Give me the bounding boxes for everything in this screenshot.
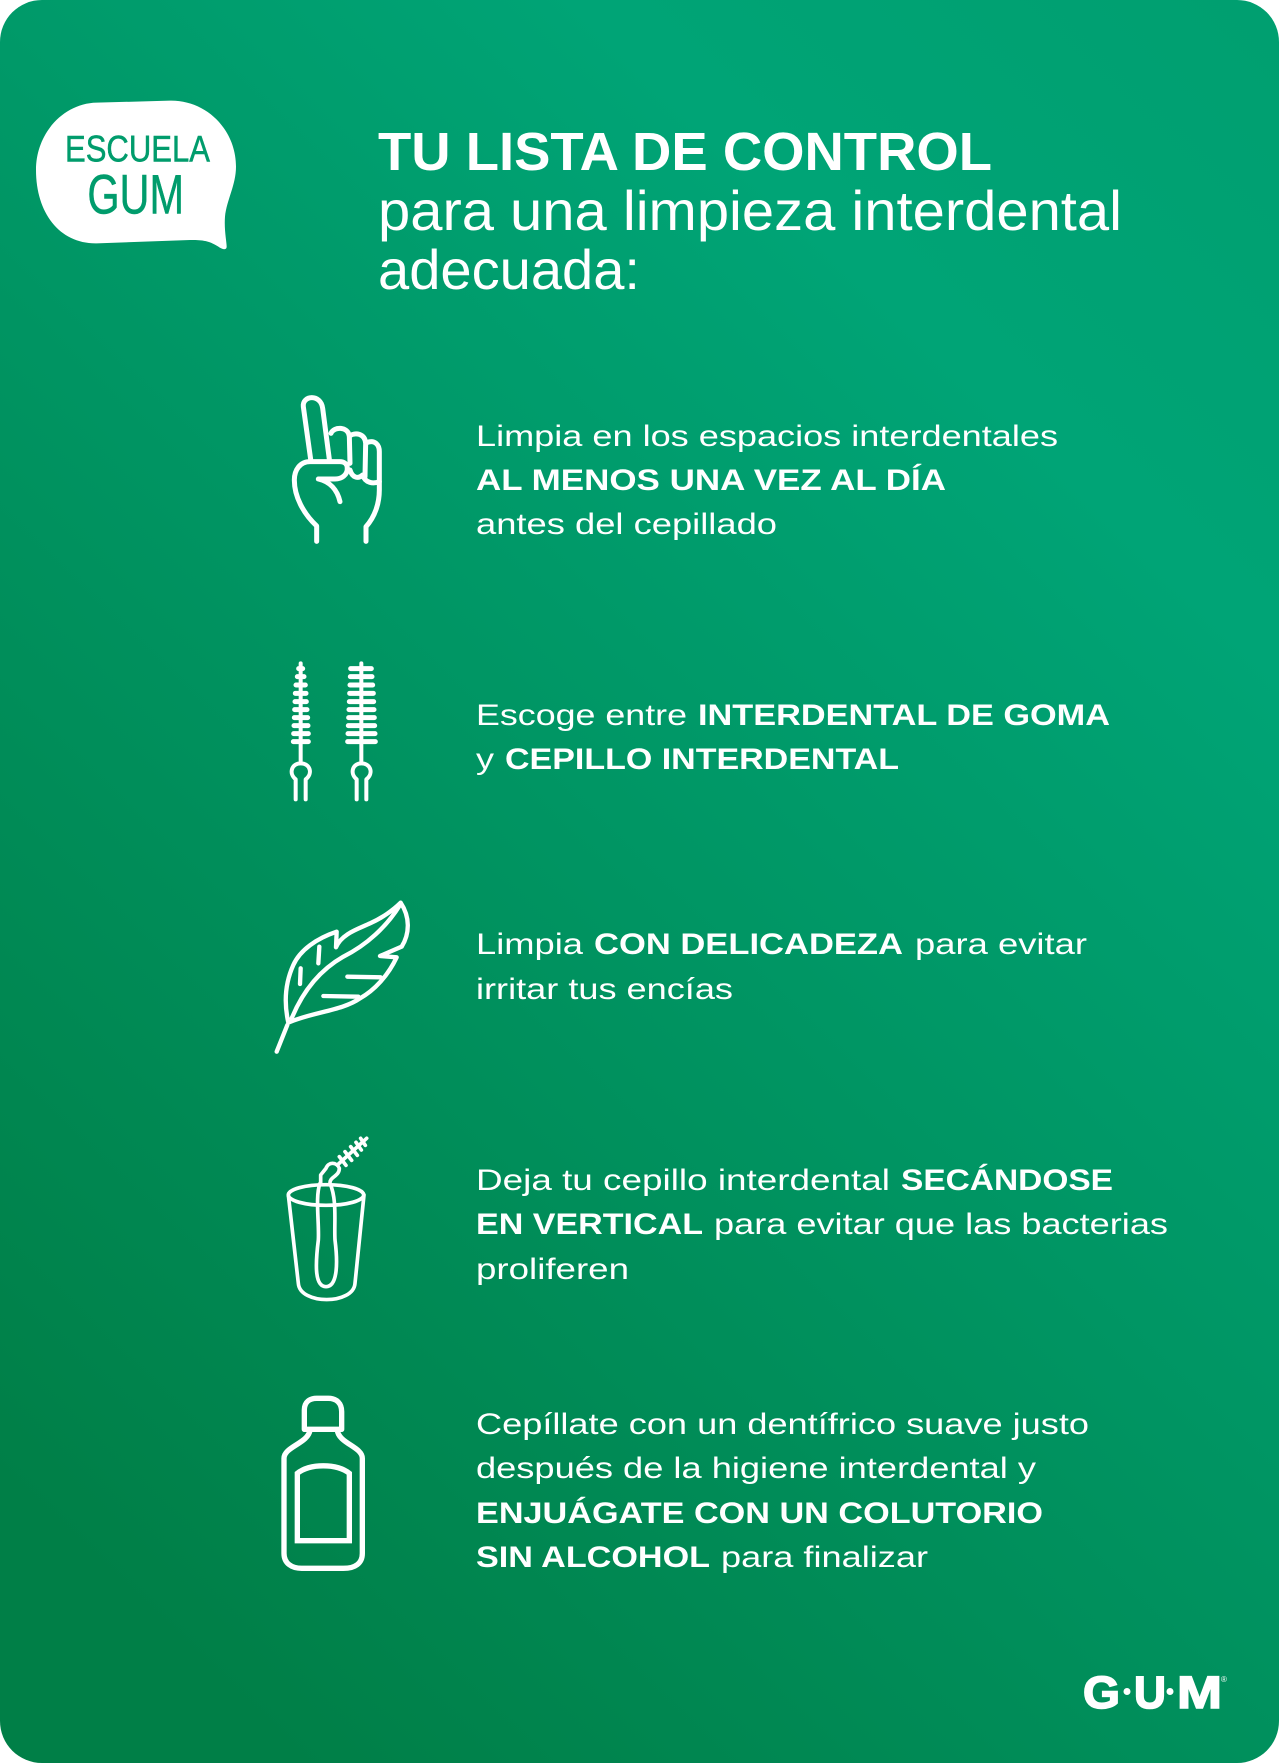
line bold: AL MENOS UNA VEZ AL DÍA xyxy=(476,463,946,497)
line run: Limpia xyxy=(476,928,583,961)
icon: interdental brushes xyxy=(292,663,375,799)
icon: mouthwash bottle xyxy=(284,1398,362,1568)
line run: para evitar xyxy=(915,928,1087,961)
logo letter M: M xyxy=(1177,1667,1222,1718)
logo letter G: G xyxy=(1083,1667,1120,1718)
bubble shape xyxy=(36,101,236,249)
icon: brush drying in glass xyxy=(288,1138,367,1300)
text block 3 xyxy=(476,928,1087,1006)
text block 4 xyxy=(476,1163,1168,1286)
bubble text: GUM: GUM xyxy=(87,163,184,225)
bubble text: ESCUELA: ESCUELA xyxy=(65,128,210,170)
text block 1 xyxy=(476,420,1058,541)
line run bold: SECÁNDOSE xyxy=(901,1163,1113,1197)
icon: feather leaf xyxy=(277,903,408,1052)
line: Cepíllate con un dentífrico suave justo xyxy=(476,1408,1089,1441)
line run bold: SIN ALCOHOL xyxy=(476,1541,710,1574)
title line 2: para una limpieza interdental xyxy=(378,179,1122,242)
logo registered mark: ® xyxy=(1221,1675,1227,1684)
title line 1: TU LISTA DE CONTROL xyxy=(378,122,992,182)
text block 5 xyxy=(476,1408,1089,1574)
line bold: ENJUÁGATE CON UN COLUTORIO xyxy=(476,1496,1043,1530)
logo letter U: U xyxy=(1134,1667,1166,1718)
GUM brand logo xyxy=(1083,1667,1227,1718)
line: proliferen xyxy=(476,1253,629,1286)
line run: para finalizar xyxy=(721,1541,928,1574)
speech bubble logo: Escuela GUM xyxy=(36,101,236,249)
line run: para evitar que las bacterias xyxy=(714,1208,1168,1241)
line run: Deja tu cepillo interdental xyxy=(476,1164,890,1197)
line run bold: CON DELICADEZA xyxy=(594,928,903,961)
line run: y xyxy=(476,743,494,776)
logo dot xyxy=(1124,1688,1130,1695)
line: irritar tus encías xyxy=(476,973,733,1006)
title line 3: adecuada: xyxy=(378,238,640,301)
line run bold: INTERDENTAL DE GOMA xyxy=(698,699,1110,732)
line run: Escoge entre xyxy=(476,699,687,732)
line: Limpia en los espacios interdentales xyxy=(476,420,1058,453)
text block 2 xyxy=(476,699,1110,776)
line: después de la higiene interdental y xyxy=(476,1452,1036,1485)
title xyxy=(378,122,1122,301)
logo dot xyxy=(1166,1688,1174,1695)
line run bold: EN VERTICAL xyxy=(476,1208,703,1241)
line: antes del cepillado xyxy=(476,508,777,541)
line run bold: CEPILLO INTERDENTAL xyxy=(505,743,899,776)
icon: raised finger hand xyxy=(294,398,379,541)
